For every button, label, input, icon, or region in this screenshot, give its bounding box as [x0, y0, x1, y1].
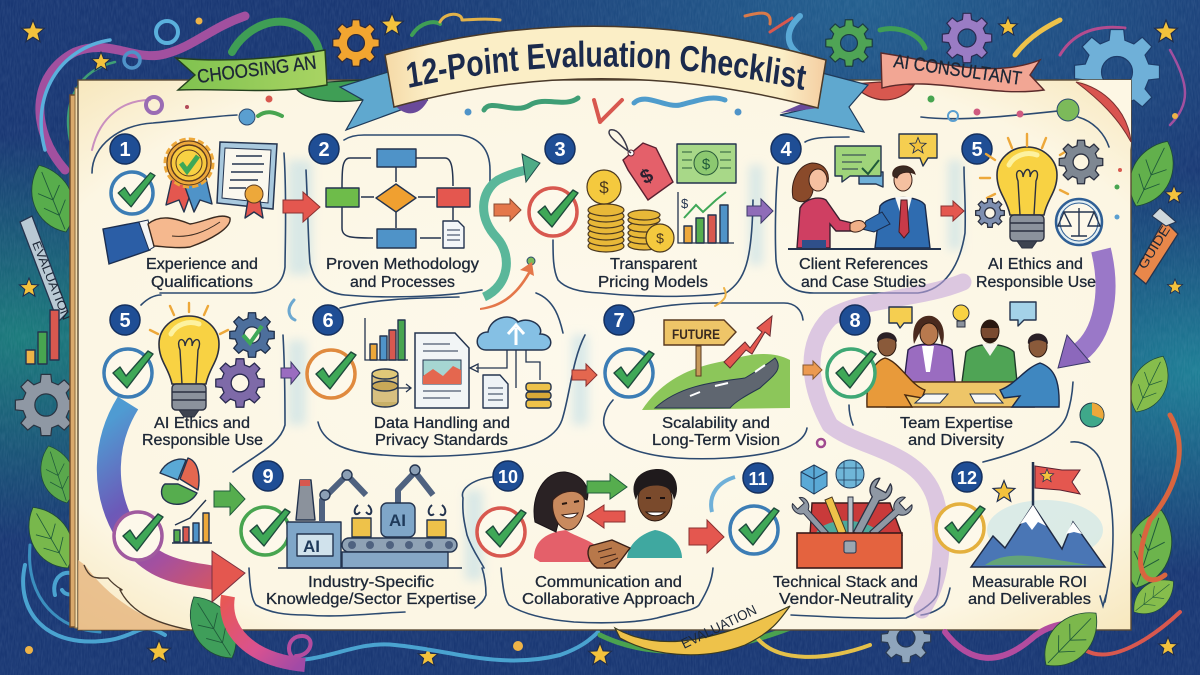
label 5: AI Ethics and: [988, 256, 1083, 273]
icon: certificate: [217, 142, 277, 218]
label 1: Qualifications: [151, 274, 253, 291]
arrow: 7 to 8: [803, 361, 822, 379]
panel 10: communication: [477, 461, 695, 608]
number badge 10: 10: [498, 467, 518, 487]
icon: light bulb second: [150, 303, 228, 417]
arrow: 4 to 5: [941, 201, 964, 221]
label 7: Long-Term Vision: [652, 432, 780, 449]
leaves overlapping the page: [177, 587, 1110, 675]
number badge 12: [952, 462, 982, 492]
label 3: Transparent: [610, 256, 698, 273]
label 6: Privacy Standards: [375, 432, 508, 449]
icon: pie chart: [160, 458, 199, 504]
label 12: Measurable ROI: [972, 574, 1087, 591]
check ring 5 second: [104, 349, 153, 397]
icon: price tag: $: [637, 164, 657, 189]
check ring 6: [307, 350, 356, 398]
icon: growth chart: [678, 192, 734, 243]
label 2: [326, 256, 479, 291]
label 9: Knowledge/Sector Expertise: [266, 591, 476, 608]
number badge 2: [309, 134, 339, 164]
icon: man shaking hands: [788, 166, 941, 249]
label 6: [374, 415, 510, 449]
number badge 4: 4: [780, 139, 792, 161]
label 8: [900, 415, 1013, 449]
panel 3: pricing: [529, 130, 736, 291]
check ring 7: [605, 349, 654, 397]
banner: AI consultant: AI CONSULTANT: [892, 51, 1023, 90]
decorative swirls top left: [40, 13, 1185, 170]
icon: document with chart: [415, 333, 469, 408]
label 5 second: Responsible Use: [142, 432, 263, 449]
number badge 5 second: 5: [119, 310, 131, 332]
arrow: up to 11: [711, 477, 735, 512]
icon: gears: [976, 140, 1103, 227]
icon: factory robots: AI: [303, 537, 320, 556]
banner tails: blue and red right: [780, 73, 914, 132]
icon: coin stacks: $: [599, 178, 609, 197]
panel 6: data handling: [307, 305, 551, 449]
label 6: Data Handling and: [374, 415, 510, 432]
label 4: [799, 256, 928, 291]
icon: speech bubbles: [835, 134, 937, 187]
ribbon: orange flourish arrow: [480, 262, 534, 310]
number badge 10: [493, 461, 523, 491]
label 9: [266, 574, 476, 608]
side tag: GUIDE: [1134, 208, 1178, 284]
panel 1: experience: [103, 134, 277, 291]
label 3: [598, 256, 708, 291]
number badge 8: [840, 305, 870, 335]
icon: toolbox with wrenches: [790, 476, 914, 568]
number badge 5 second: [110, 305, 140, 335]
label 2: Proven Methodology: [326, 256, 479, 273]
panel outlines: [92, 110, 1113, 623]
pale shading between panels: [288, 160, 962, 580]
label 5: Responsible Use: [976, 274, 1096, 291]
label 4: and Case Studies: [801, 274, 926, 291]
label 8: Team Expertise: [900, 415, 1013, 432]
number badge 9: [253, 461, 283, 491]
check ring 11: [730, 506, 779, 554]
number badge 1: 1: [119, 139, 131, 161]
arrow: to 9: [214, 483, 245, 515]
number badge 7: 7: [613, 310, 625, 332]
icon: banknote: $: [702, 156, 711, 173]
icon: flowchart: [326, 149, 470, 248]
label 10: Communication and: [535, 574, 682, 591]
label 12: and Deliverables: [968, 591, 1091, 608]
number badge 3: 3: [554, 139, 566, 161]
label 10: Collaborative Approach: [522, 591, 695, 608]
icon: price tag: [609, 130, 673, 200]
top page decorations: [92, 96, 1122, 447]
icon: team around table: [867, 302, 1059, 407]
icon: woman: [534, 472, 596, 562]
icon: handshake: [588, 540, 630, 568]
icon: man: [627, 469, 682, 558]
label 5 second: AI Ethics and: [154, 415, 250, 432]
arrow: 3 right orange: [494, 199, 521, 221]
side tag: EVALUATION: [20, 216, 74, 322]
panel 8: team: [827, 302, 1059, 449]
banner: evaluation: EVALUATION: [678, 601, 759, 652]
label 1: [146, 256, 258, 291]
number badge 3: [545, 134, 575, 164]
check ring 1: [111, 172, 155, 214]
arrow: 5 to 6: [281, 362, 300, 384]
small chart dot right margin: [1080, 403, 1104, 427]
label 3: Pricing Models: [598, 274, 708, 291]
label 7: [652, 415, 780, 449]
number badge 11: [743, 463, 773, 493]
label 11: Vendor-Neutrality: [779, 591, 913, 608]
banner: evaluation: [615, 601, 790, 655]
number badge 7: [604, 305, 634, 335]
number badge 2: 2: [318, 139, 330, 161]
icon: rosette: [166, 140, 212, 212]
icon: open hand: [103, 216, 230, 264]
label 5: [976, 256, 1096, 291]
icon: polyhedra: [801, 460, 864, 494]
icon: mountain with flag: [971, 462, 1105, 567]
icon: factory robots: AI: [389, 511, 406, 530]
panel 2: methodology: [309, 134, 479, 291]
panel 11: technical stack: [730, 460, 918, 608]
icon: cloud upload: [470, 317, 551, 388]
number badge 11: 11: [748, 469, 768, 489]
ribbon: green swoosh arrow 2 to 3: [484, 154, 540, 297]
number badge 1: [110, 134, 140, 164]
icon: bar chart: [365, 318, 408, 360]
check ring 3: [529, 188, 578, 236]
banner: choosing an: CHOOSING AN: [196, 52, 318, 88]
number badge 5: 5: [971, 139, 983, 161]
icon: banknote: [677, 144, 736, 183]
icon: road to the future: [642, 316, 790, 410]
panel 5: AI ethics top: [962, 134, 1103, 291]
panel 9: industry: [241, 461, 476, 608]
arrow: 3 to 4: [747, 199, 773, 223]
number badge 9: 9: [262, 466, 274, 488]
panel 4: references: [771, 134, 941, 291]
label 2: and Processes: [350, 274, 455, 291]
number badge 6: 6: [322, 310, 334, 332]
book page: [70, 80, 1131, 630]
leaves in margins: [17, 133, 1185, 623]
mini bar chart left margin: [26, 310, 59, 364]
label 11: [773, 574, 918, 608]
label 4: Client References: [799, 256, 928, 273]
label 12: [968, 574, 1091, 608]
check ring lower left: [114, 512, 163, 560]
number badge 6: [313, 305, 343, 335]
icon: growth chart: $: [681, 196, 689, 211]
icon: mini chart: [172, 500, 212, 543]
arrow: 1 to 2: [283, 192, 320, 222]
icon: database stacks: [372, 369, 551, 408]
number badge 4: [771, 134, 801, 164]
check ring 10: [477, 508, 526, 556]
icon: green and red exchange arrows: [587, 474, 627, 528]
icon: coin stacks: [587, 170, 674, 252]
side tag: EVALUATION: EVALUATION: [29, 239, 74, 322]
ribbon: purple flow across middle: [812, 282, 963, 610]
ribbon: rainbow arrow bottom left: [109, 403, 305, 665]
label 8: and Diversity: [908, 432, 1004, 449]
check ring 9: [241, 507, 290, 555]
icon: coin stacks: $: [656, 230, 664, 246]
number badge 12: 12: [957, 468, 977, 488]
side tag: GUIDE: GUIDE: [1135, 223, 1173, 272]
label 10: [522, 574, 695, 608]
number badge 5: [962, 134, 992, 164]
label 7: Scalability and: [662, 415, 770, 432]
icon: light bulb: [980, 134, 1068, 248]
label 5 second: [142, 415, 263, 449]
title banner: [384, 26, 827, 109]
label 9: Industry-Specific: [308, 574, 434, 591]
check ring lower left with pie chart: [114, 458, 212, 560]
icon: woman shaking hands: [792, 163, 856, 249]
label 1: Experience and: [146, 256, 258, 273]
ribbon: purple arrow right: [1058, 250, 1105, 368]
icon: scales of justice: [1056, 199, 1102, 245]
panel 7: scalability: [604, 305, 790, 449]
banner tails: green and blue left: [293, 72, 428, 130]
arrow: 10 to 11: [689, 520, 724, 553]
bottom and side ribbons: [23, 113, 1180, 660]
icon: factory robots: [278, 465, 462, 568]
panel 5b: AI ethics lower: [104, 303, 274, 449]
arrow: 6 to 7: [572, 364, 597, 386]
label 11: Technical Stack and: [773, 574, 918, 591]
icon: road to the future: FUTURE: [672, 326, 720, 342]
check ring 12: [936, 504, 985, 552]
panel 12: ROI: [936, 462, 1105, 608]
check ring 8: [827, 349, 876, 397]
icon: gears second: [216, 313, 274, 407]
number badge 8: 8: [849, 310, 861, 332]
title: 12-Point Evaluation Checklist: [407, 40, 806, 90]
